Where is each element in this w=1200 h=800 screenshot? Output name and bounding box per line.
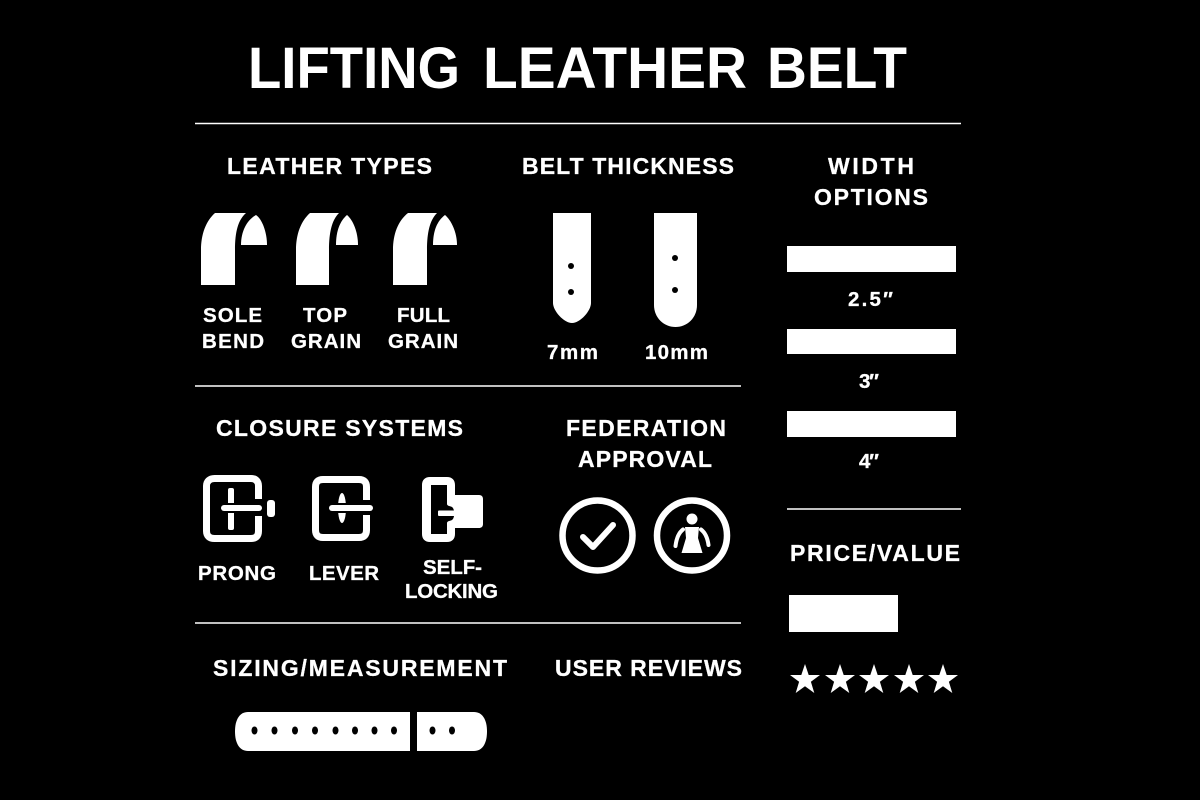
width bar 4 inch [787,411,956,473]
star rating [790,664,958,693]
heading: sizing/measurement: SIZING/MEASUREMENT [213,655,507,681]
item: top grain: TOP [303,304,347,327]
item: self-locking buckle: LOCKING [405,580,498,603]
item: full grain: FULL [397,304,450,327]
width bar 3 inch [787,329,956,393]
item: prong buckle [198,478,276,585]
item: lever buckle: LEVER [309,562,379,585]
panel: federation approval [562,415,727,570]
heading: closure systems: CLOSURE SYSTEMS [216,415,463,441]
heading: width options [814,153,928,210]
item: top grain [291,213,361,353]
item: 7mm belt [547,213,598,364]
price bar [789,595,898,632]
belt strip with holes [235,712,487,751]
title [248,36,907,101]
title: LEATHER [483,36,747,101]
item: self-locking buckle: SELF- [423,556,482,579]
width bar 4 inch: 4″ [859,450,879,473]
heading: federation approval: FEDERATION [566,415,726,441]
item: prong buckle: PRONG [198,562,276,585]
item: sole bend [201,213,267,353]
item: lever buckle [309,480,379,585]
panel: closure systems [198,415,498,603]
item: 7mm belt: 7mm [547,341,598,364]
width bar 2.5 inch [787,246,956,311]
item: full grain [388,213,458,353]
item: full grain: GRAIN [388,330,458,353]
title: BELT [767,36,907,101]
panel: width options [787,153,956,473]
icon: check badge [562,500,632,570]
item: self-locking buckle [405,477,498,603]
panel: leather types [201,153,458,353]
panel: price and value [789,540,960,693]
heading: federation approval [566,415,726,472]
item: 10mm belt [645,213,708,364]
width bar 3 inch: 3″ [859,370,879,393]
icon: athlete badge [657,500,727,570]
heading: federation approval: APPROVAL [578,446,712,472]
width bar 2.5 inch: 2.5″ [848,288,893,311]
item: sole bend: SOLE [203,304,262,327]
heading: width options: OPTIONS [814,184,928,210]
panel: belt thickness [522,153,734,364]
item: top grain: GRAIN [291,330,361,353]
heading: price/value: PRICE/VALUE [790,540,960,566]
heading: belt thickness: BELT THICKNESS [522,153,734,179]
panel: sizing and measurement [213,655,507,751]
heading: user reviews: USER REVIEWS [555,655,742,681]
heading: width options: WIDTH [828,153,914,179]
item: 10mm belt: 10mm [645,341,708,364]
item: sole bend: BEND [202,330,264,353]
heading: leather types: LEATHER TYPES [227,153,432,179]
title: LIFTING [248,36,460,101]
